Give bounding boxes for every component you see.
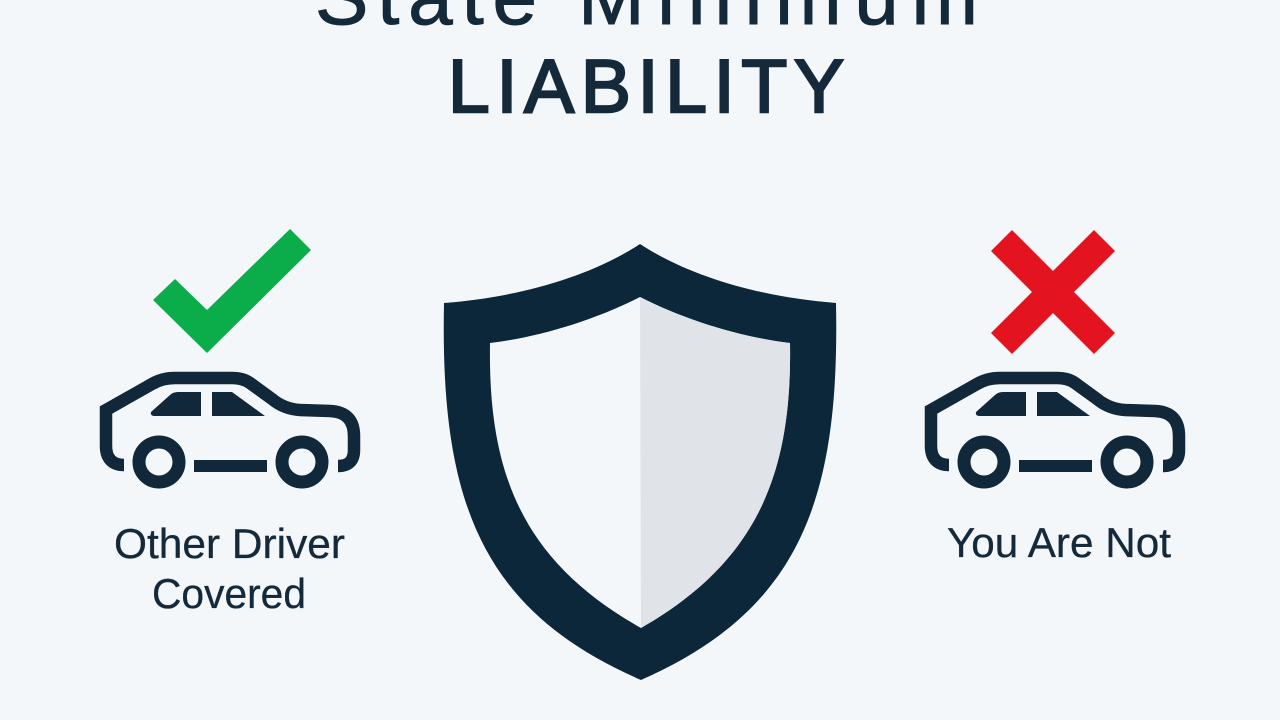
label: other driver covered: Covered bbox=[152, 570, 306, 617]
label: you are not: You Are Not bbox=[947, 519, 1171, 566]
label: other driver covered bbox=[114, 520, 345, 617]
icon: car, you bbox=[931, 378, 1179, 482]
icon: shield bbox=[444, 244, 836, 680]
icon: red cross bbox=[991, 230, 1115, 354]
title: LIABILITY bbox=[448, 44, 844, 128]
icon: car, other driver bbox=[106, 378, 354, 482]
label: other driver covered: Other Driver bbox=[114, 520, 345, 567]
title bbox=[315, 0, 978, 128]
icon: green check mark bbox=[153, 229, 311, 353]
